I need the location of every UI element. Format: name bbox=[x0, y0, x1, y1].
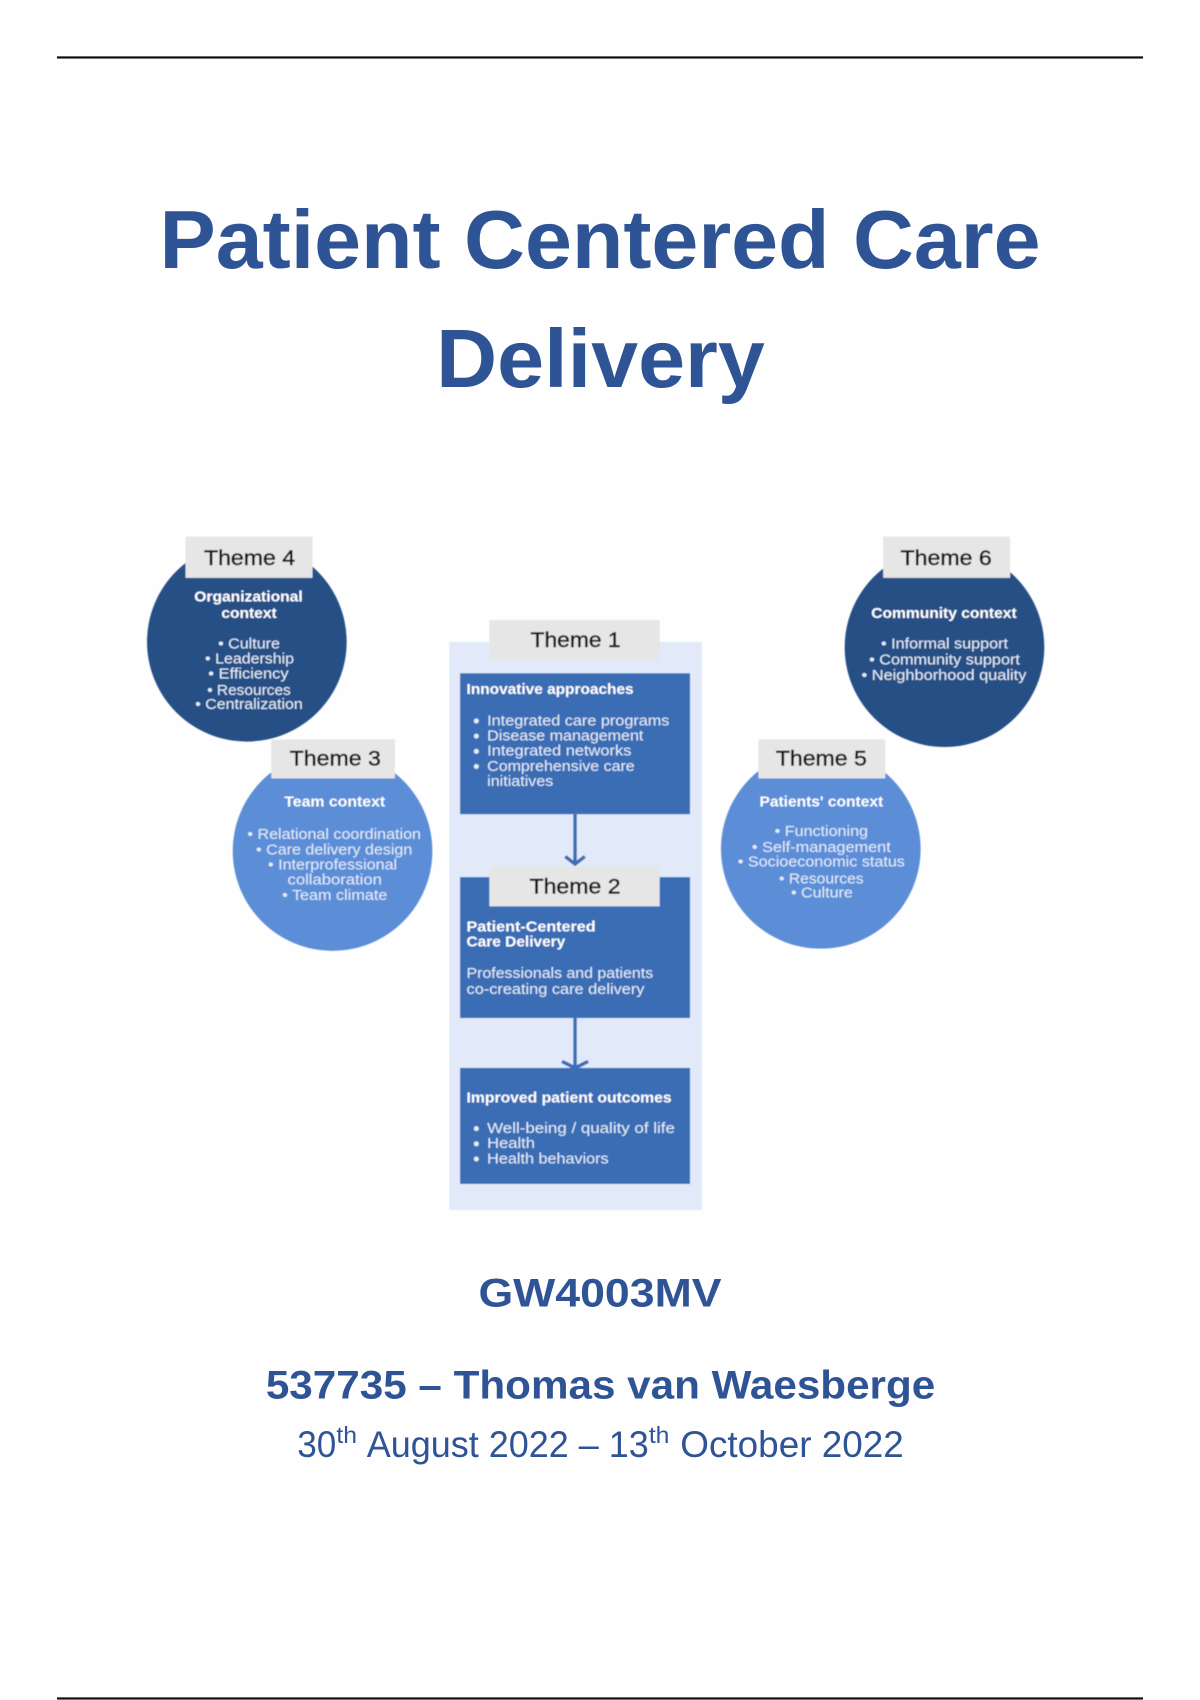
box: improved patient outcomes: Well-being / quality of life bbox=[487, 1121, 675, 1137]
box: innovative approaches: Integrated care programs bbox=[487, 713, 669, 729]
panel: theme 5 patients' context: • Functioning bbox=[775, 824, 868, 840]
panel: theme 5 patients' context: • Resources bbox=[779, 872, 864, 888]
panel: theme 5 patients' context: • Self-management bbox=[752, 840, 891, 856]
box: innovative approaches: Integrated networks bbox=[487, 744, 631, 760]
arrow: theme 2 to outcomes bbox=[562, 1018, 588, 1068]
panel: theme 4 organizational context: • Resources bbox=[207, 683, 291, 699]
date range: th bbox=[336, 1422, 357, 1448]
box: patient-centered care delivery: Care Delivery bbox=[467, 934, 566, 950]
title: Patient Centered Care bbox=[159, 194, 1041, 286]
title: Delivery bbox=[436, 313, 765, 405]
panel: theme 3 team context: • Care delivery design bbox=[256, 842, 412, 858]
panel: theme 4 organizational context: • Leadership bbox=[205, 652, 294, 668]
label: theme 2 bbox=[489, 866, 660, 906]
label: theme 1: Theme 1 bbox=[531, 627, 621, 652]
panel: theme 6 community context: • Informal support bbox=[881, 636, 1008, 652]
box: improved patient outcomes: Health bbox=[487, 1136, 535, 1152]
arrow: theme 1 to theme 2 bbox=[565, 814, 585, 864]
date range: August 2022 – 13 bbox=[367, 1424, 649, 1465]
box: improved patient outcomes bbox=[460, 1068, 690, 1184]
box: innovative approaches: Disease management bbox=[487, 729, 643, 744]
student number and name: 537735 – Thomas van Waesberge bbox=[266, 1363, 935, 1408]
box: innovative approaches bbox=[460, 673, 690, 814]
title bbox=[159, 194, 1041, 405]
panel: theme 5 patients' context bbox=[721, 739, 921, 949]
panel: theme 4 organizational context: Organizational bbox=[194, 590, 303, 606]
panel: theme 6 community context bbox=[845, 537, 1044, 747]
panel: theme 4 organizational context: Theme 4 bbox=[204, 545, 295, 570]
panel: theme 3 team context: Theme 3 bbox=[290, 745, 381, 770]
box: innovative approaches: Comprehensive care bbox=[487, 759, 635, 775]
panel: theme 4 organizational context: • Efficiency bbox=[208, 667, 289, 683]
panel: theme 4 organizational context: context bbox=[221, 606, 277, 622]
box: patient-centered care delivery: Patient-Centered bbox=[467, 919, 596, 935]
panel: theme 6 community context: • Community support bbox=[869, 653, 1020, 669]
panel: theme 3 team context: • Team climate bbox=[282, 888, 387, 904]
box: patient-centered care delivery: Professionals and patients bbox=[467, 966, 653, 982]
panel: theme 4 organizational context: • Culture bbox=[218, 636, 280, 652]
panel: theme 5 patients' context: • Culture bbox=[791, 886, 853, 902]
panel: theme 6 community context: Theme 6 bbox=[901, 545, 992, 570]
panel: central column background bbox=[449, 642, 702, 1210]
box: patient-centered care delivery: co-creating care delivery bbox=[467, 982, 645, 998]
panel: theme 5 patients' context: • Socioeconomic status bbox=[738, 854, 905, 870]
panel: theme 3 team context bbox=[233, 739, 432, 951]
panel: theme 3 team context: • Relational coordination bbox=[247, 827, 421, 843]
course code: GW4003MV bbox=[478, 1270, 722, 1315]
date range: th bbox=[649, 1422, 669, 1448]
box: innovative approaches: Innovative approaches bbox=[467, 682, 634, 698]
panel: theme 4 organizational context: • Centralization bbox=[195, 697, 303, 713]
panel: theme 5 patients' context: Theme 5 bbox=[776, 745, 867, 770]
label: theme 2: Theme 2 bbox=[529, 873, 621, 898]
diagram: patient centered care themes bbox=[147, 537, 1044, 1210]
panel: theme 4 organizational context bbox=[147, 537, 347, 742]
panel: theme 6 community context: Community context bbox=[871, 606, 1017, 622]
date range bbox=[297, 1422, 904, 1465]
panel: theme 6 community context: • Neighborhood quality bbox=[861, 668, 1027, 684]
box: improved patient outcomes: Improved patient outcomes bbox=[467, 1091, 672, 1107]
panel: theme 3 team context: Team context bbox=[284, 795, 385, 811]
label: theme 1 bbox=[489, 620, 660, 660]
box: improved patient outcomes: Health behaviors bbox=[487, 1151, 609, 1167]
box: patient-centered care delivery bbox=[460, 877, 690, 1018]
panel: theme 5 patients' context: Patients' context bbox=[759, 795, 883, 811]
date range: 30 bbox=[297, 1424, 336, 1465]
box: innovative approaches: initiatives bbox=[487, 774, 553, 790]
panel: theme 3 team context: collaboration bbox=[288, 873, 382, 889]
date range: October 2022 bbox=[680, 1424, 904, 1465]
panel: theme 3 team context: • Interprofessional bbox=[268, 858, 397, 874]
